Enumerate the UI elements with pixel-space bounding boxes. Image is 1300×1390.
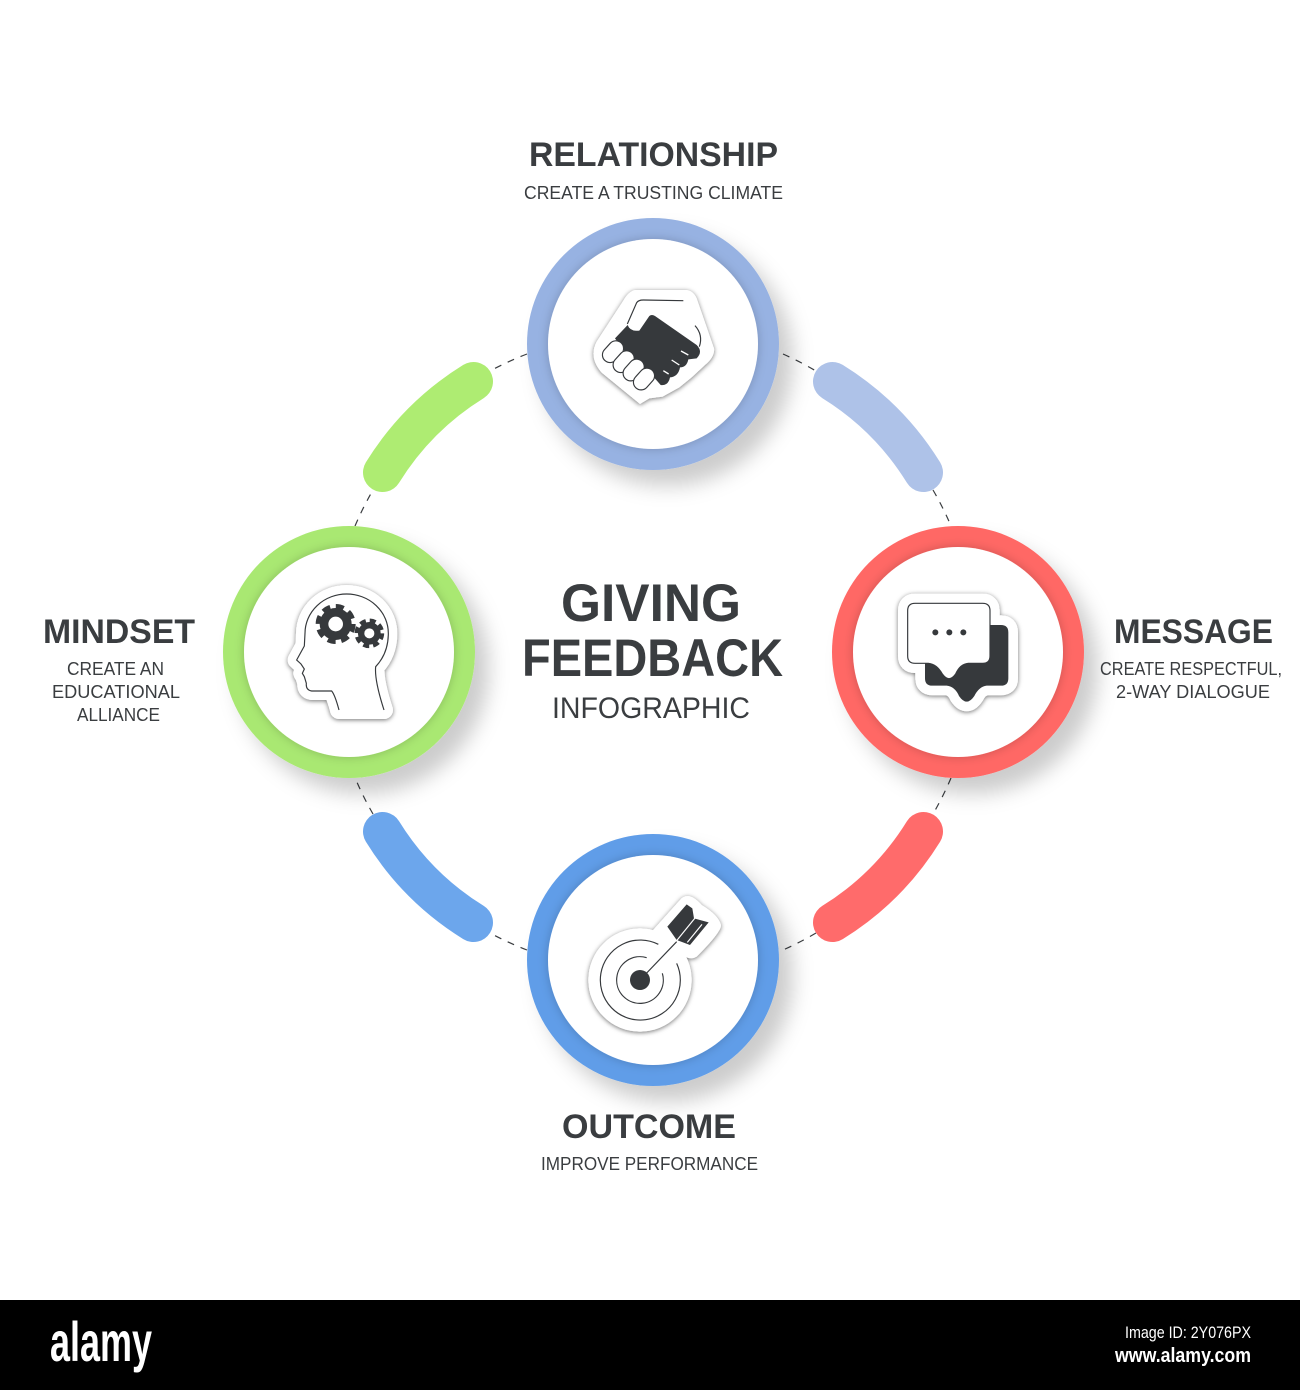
panel: outcome circle bbox=[527, 834, 779, 1086]
label: outcome bbox=[541, 1108, 758, 1174]
title: Giving Feedback: FEEDBACK bbox=[522, 629, 783, 688]
arc: bottom right connector bbox=[832, 832, 924, 922]
label: mindset: CREATE AN bbox=[67, 659, 164, 679]
label: message bbox=[1100, 613, 1282, 702]
panel: relationship circle bbox=[527, 218, 779, 470]
label: outcome: OUTCOME bbox=[562, 1108, 736, 1146]
title: Giving Feedback: GIVING bbox=[561, 574, 741, 633]
watermark bar bbox=[0, 1300, 1300, 1390]
label: mindset: EDUCATIONAL bbox=[52, 682, 180, 702]
watermark bar: Image ID: 2Y076PX bbox=[1125, 1323, 1251, 1342]
arc: top right connector bbox=[832, 382, 924, 472]
label: mindset: MINDSET bbox=[43, 613, 195, 651]
panel: mindset circle bbox=[223, 526, 475, 778]
label: mindset bbox=[43, 613, 195, 725]
label: message: MESSAGE bbox=[1114, 613, 1273, 651]
label: message: 2-WAY DIALOGUE bbox=[1116, 682, 1270, 702]
watermark bar: www.alamy.com bbox=[1114, 1345, 1251, 1367]
title: Giving Feedback: INFOGRAPHIC bbox=[552, 692, 750, 725]
arc: top left connector bbox=[382, 382, 474, 472]
title: Giving Feedback bbox=[522, 574, 783, 725]
label: relationship bbox=[524, 136, 783, 203]
panel: message circle bbox=[832, 526, 1084, 778]
icon: target with arrow bbox=[588, 896, 721, 1032]
arc: bottom left connector bbox=[382, 832, 474, 922]
label: message: CREATE RESPECTFUL, bbox=[1100, 659, 1282, 679]
watermark bar: alamy bbox=[50, 1310, 152, 1373]
label: relationship: RELATIONSHIP bbox=[529, 136, 778, 174]
label: outcome: IMPROVE PERFORMANCE bbox=[541, 1154, 758, 1174]
label: relationship: CREATE A TRUSTING CLIMATE bbox=[524, 183, 783, 203]
icon: handshake bbox=[593, 290, 714, 404]
icon: head with gears bbox=[297, 594, 388, 710]
icon: speech bubbles bbox=[908, 603, 1008, 702]
label: mindset: ALLIANCE bbox=[77, 705, 160, 725]
